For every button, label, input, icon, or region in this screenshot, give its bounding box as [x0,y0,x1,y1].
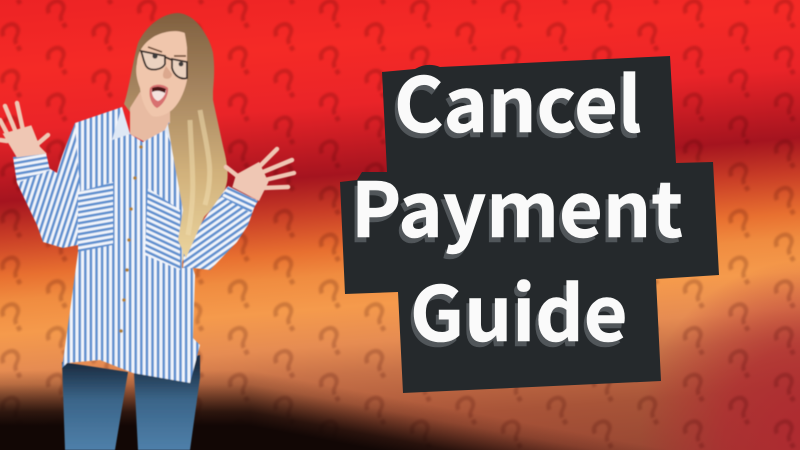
right cuff [222,186,258,213]
right hand [226,149,294,198]
collar [112,107,180,150]
red glow bottom right [600,250,800,450]
jeans [62,355,200,450]
glasses [141,51,187,79]
question mark pattern: ????????? [37,222,800,274]
face hair strand [168,27,226,258]
hair highlight streaks [188,110,210,235]
dark backing shape [340,56,719,393]
hair back [124,13,228,262]
title line: Cancel: Cancel [391,49,639,159]
neck [130,92,170,142]
eyes [152,53,183,66]
mouth [149,85,168,108]
question mark pattern: ????????? [0,245,763,297]
buttons [119,145,143,333]
left sleeve [13,123,80,248]
nose [163,66,172,79]
question mark pattern: ????????? [0,385,763,437]
title line: Guide: Guide [407,258,625,368]
question mark pattern: ????????? [0,104,763,157]
left cuff [13,153,50,183]
question mark pattern: ????????? [37,35,800,87]
question mark pattern: ????????? [37,362,800,414]
title panel [340,44,719,393]
question mark pattern: ????????? [37,175,800,227]
title line: Cancel: Cancel [394,44,642,154]
brows [148,47,186,56]
question mark pattern: ????????? [0,198,763,250]
question mark pattern: ????????? [37,81,800,134]
question mark pattern: ????????? [37,128,800,180]
left hand [0,103,48,155]
dark vignette bottom left [0,340,800,450]
face [136,31,187,117]
shirt torso [62,107,200,383]
right sleeve [183,187,257,270]
question mark pattern: ????????? [0,11,763,63]
title line: Payment: Payment [351,149,683,259]
pockets [78,182,180,270]
question mark pattern: ????????? [0,151,763,203]
title line: Payment: Payment [348,154,680,264]
question mark pattern: ????????? [0,58,763,110]
question mark pattern: ????????? [37,315,800,367]
woman photo [0,13,294,450]
title line: Guide: Guide [410,253,628,363]
question mark pattern: ????????? [0,338,763,390]
question mark pattern: ????????? [0,291,763,344]
question mark pattern: ????????? [37,268,800,321]
